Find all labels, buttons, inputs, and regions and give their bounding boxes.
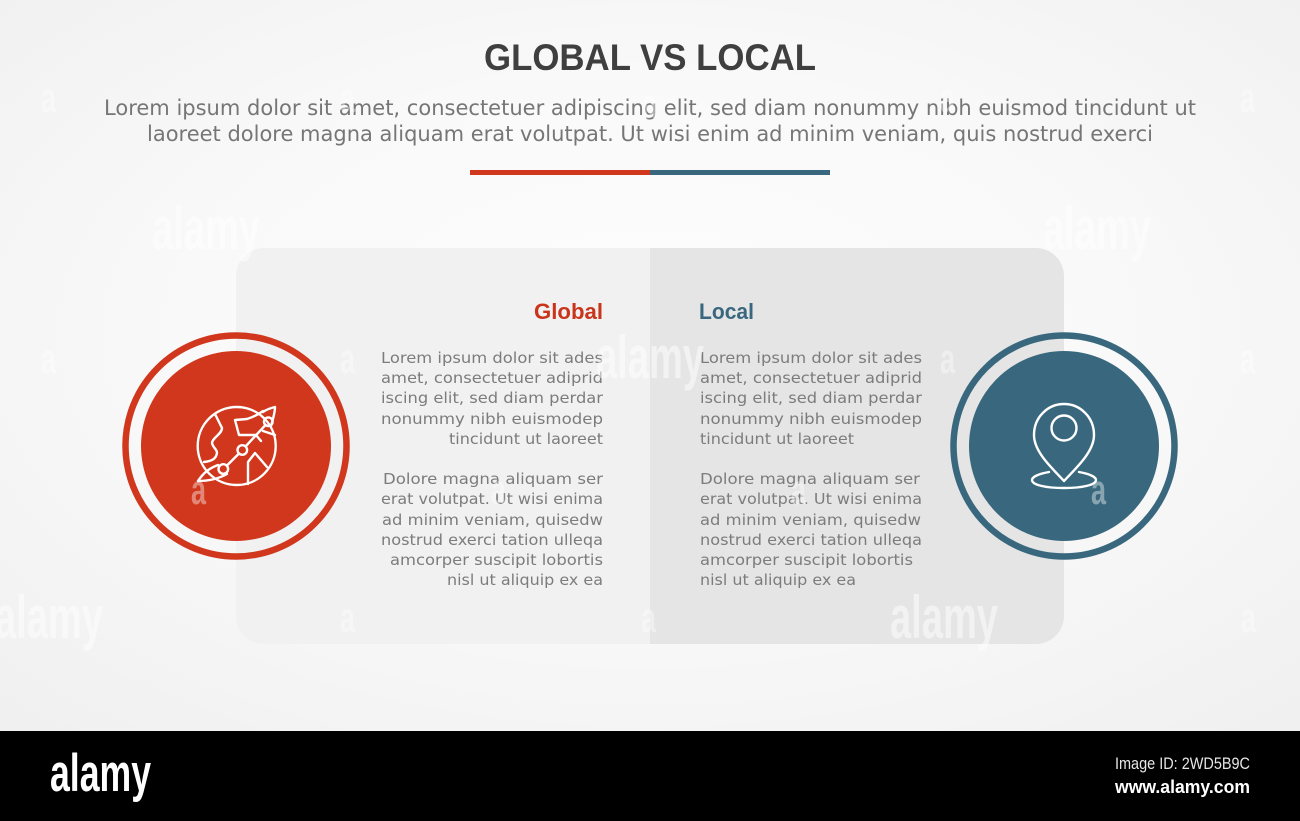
- text block: Local paragraph 2: nostrud exerci tation ulleqa: [700, 531, 922, 549]
- text block: Global paragraph 2: erat volutpat. Ut wisi enima: [381, 490, 603, 508]
- website: www.alamy.com: [1114, 777, 1250, 797]
- heading: Local: Local: [699, 299, 754, 324]
- heading: Global: Global: [534, 299, 603, 324]
- watermarks: alamy: [1043, 195, 1151, 262]
- text block: Global paragraph 2: nisl ut aliquip ex ea: [447, 571, 603, 589]
- watermarks: a: [940, 74, 955, 121]
- text block: Global paragraph 2: [381, 470, 604, 589]
- text block: Local paragraph 2: erat volutpat. Ut wisi enima: [700, 490, 922, 508]
- footer banner: [0, 731, 1300, 821]
- watermarks: a: [491, 466, 506, 513]
- badge: Global circle: [126, 336, 346, 556]
- panel: comparison card: [236, 248, 1064, 644]
- text block: Local paragraph 2: ad minim veniam, quisedw: [700, 511, 921, 529]
- watermarks: a: [642, 80, 657, 127]
- text block: Local paragraph 1: amet, consectetuer adiprid: [700, 369, 922, 387]
- watermarks: a: [41, 335, 56, 382]
- watermarks: a: [641, 594, 656, 641]
- text block: Global paragraph 1: nonummy nibh euismodep: [381, 410, 603, 428]
- watermarks: a: [340, 74, 355, 121]
- text block: Global paragraph 2: Dolore magna aliquam ser: [383, 470, 604, 488]
- text block: Global paragraph 1: [381, 349, 604, 448]
- text block: Global paragraph 1: iscing elit, sed diam perdar: [381, 389, 604, 407]
- text block: Global paragraph 1: Lorem ipsum dolor sit ades: [381, 349, 603, 367]
- watermarks: [0, 74, 1256, 651]
- text block: Local paragraph 2: nisl ut aliquip ex ea: [700, 571, 856, 589]
- text block: Global paragraph 1: tincidunt ut laoreet: [449, 430, 603, 448]
- watermarks: a: [340, 335, 355, 382]
- text block: Local paragraph 2: [700, 470, 922, 589]
- text block: Local paragraph 2: amcorper suscipit lobortis: [700, 551, 913, 569]
- watermarks: a: [1091, 466, 1106, 513]
- watermarks: a: [340, 594, 355, 641]
- title divider bar: [470, 170, 830, 175]
- image id: Image ID: 2WD5B9C: [1115, 754, 1250, 773]
- text block: Local paragraph 1: [700, 349, 923, 448]
- watermarks: alamy: [596, 324, 704, 391]
- watermarks: a: [41, 74, 56, 121]
- subtitle text: laoreet dolore magna aliquam erat volutpat. Ut wisi enim ad minim veniam, quis nostrud exerci: [147, 122, 1153, 146]
- text block: Global paragraph 2: amcorper suscipit lobortis: [390, 551, 603, 569]
- subtitle text: Lorem ipsum dolor sit amet, consectetuer adipiscing elit, sed diam nonummy nibh euismod tincidunt ut: [104, 96, 1196, 120]
- watermarks: alamy: [890, 584, 998, 651]
- watermarks: a: [940, 335, 955, 382]
- text block: Local paragraph 2: Dolore magna aliquam ser: [700, 470, 921, 488]
- icon: globe with route: [198, 407, 276, 485]
- watermarks: alamy: [0, 584, 103, 651]
- watermarks: a: [191, 466, 206, 513]
- watermarks: alamy: [152, 195, 260, 262]
- subtitle text: [104, 96, 1196, 146]
- text block: Local paragraph 1: tincidunt ut laoreet: [700, 430, 854, 448]
- text block: Global paragraph 2: nostrud exerci tation ulleqa: [381, 531, 603, 549]
- text block: Global paragraph 2: ad minim veniam, quisedw: [382, 511, 603, 529]
- watermarks: a: [791, 466, 806, 513]
- title: GLOBAL VS LOCAL: [484, 37, 816, 78]
- text block: Global paragraph 1: amet, consectetuer adiprid: [381, 369, 603, 387]
- watermarks: a: [1241, 594, 1256, 641]
- icon: map pin: [1032, 404, 1096, 488]
- text block: Local paragraph 1: nonummy nibh euismodep: [700, 410, 922, 428]
- watermarks: a: [1240, 335, 1255, 382]
- badge: Local circle: [954, 336, 1174, 556]
- footer logo: alamy: [50, 744, 151, 803]
- watermarks: a: [1240, 74, 1255, 121]
- text block: Local paragraph 1: iscing elit, sed diam perdar: [700, 389, 923, 407]
- text block: Local paragraph 1: Lorem ipsum dolor sit ades: [700, 349, 922, 367]
